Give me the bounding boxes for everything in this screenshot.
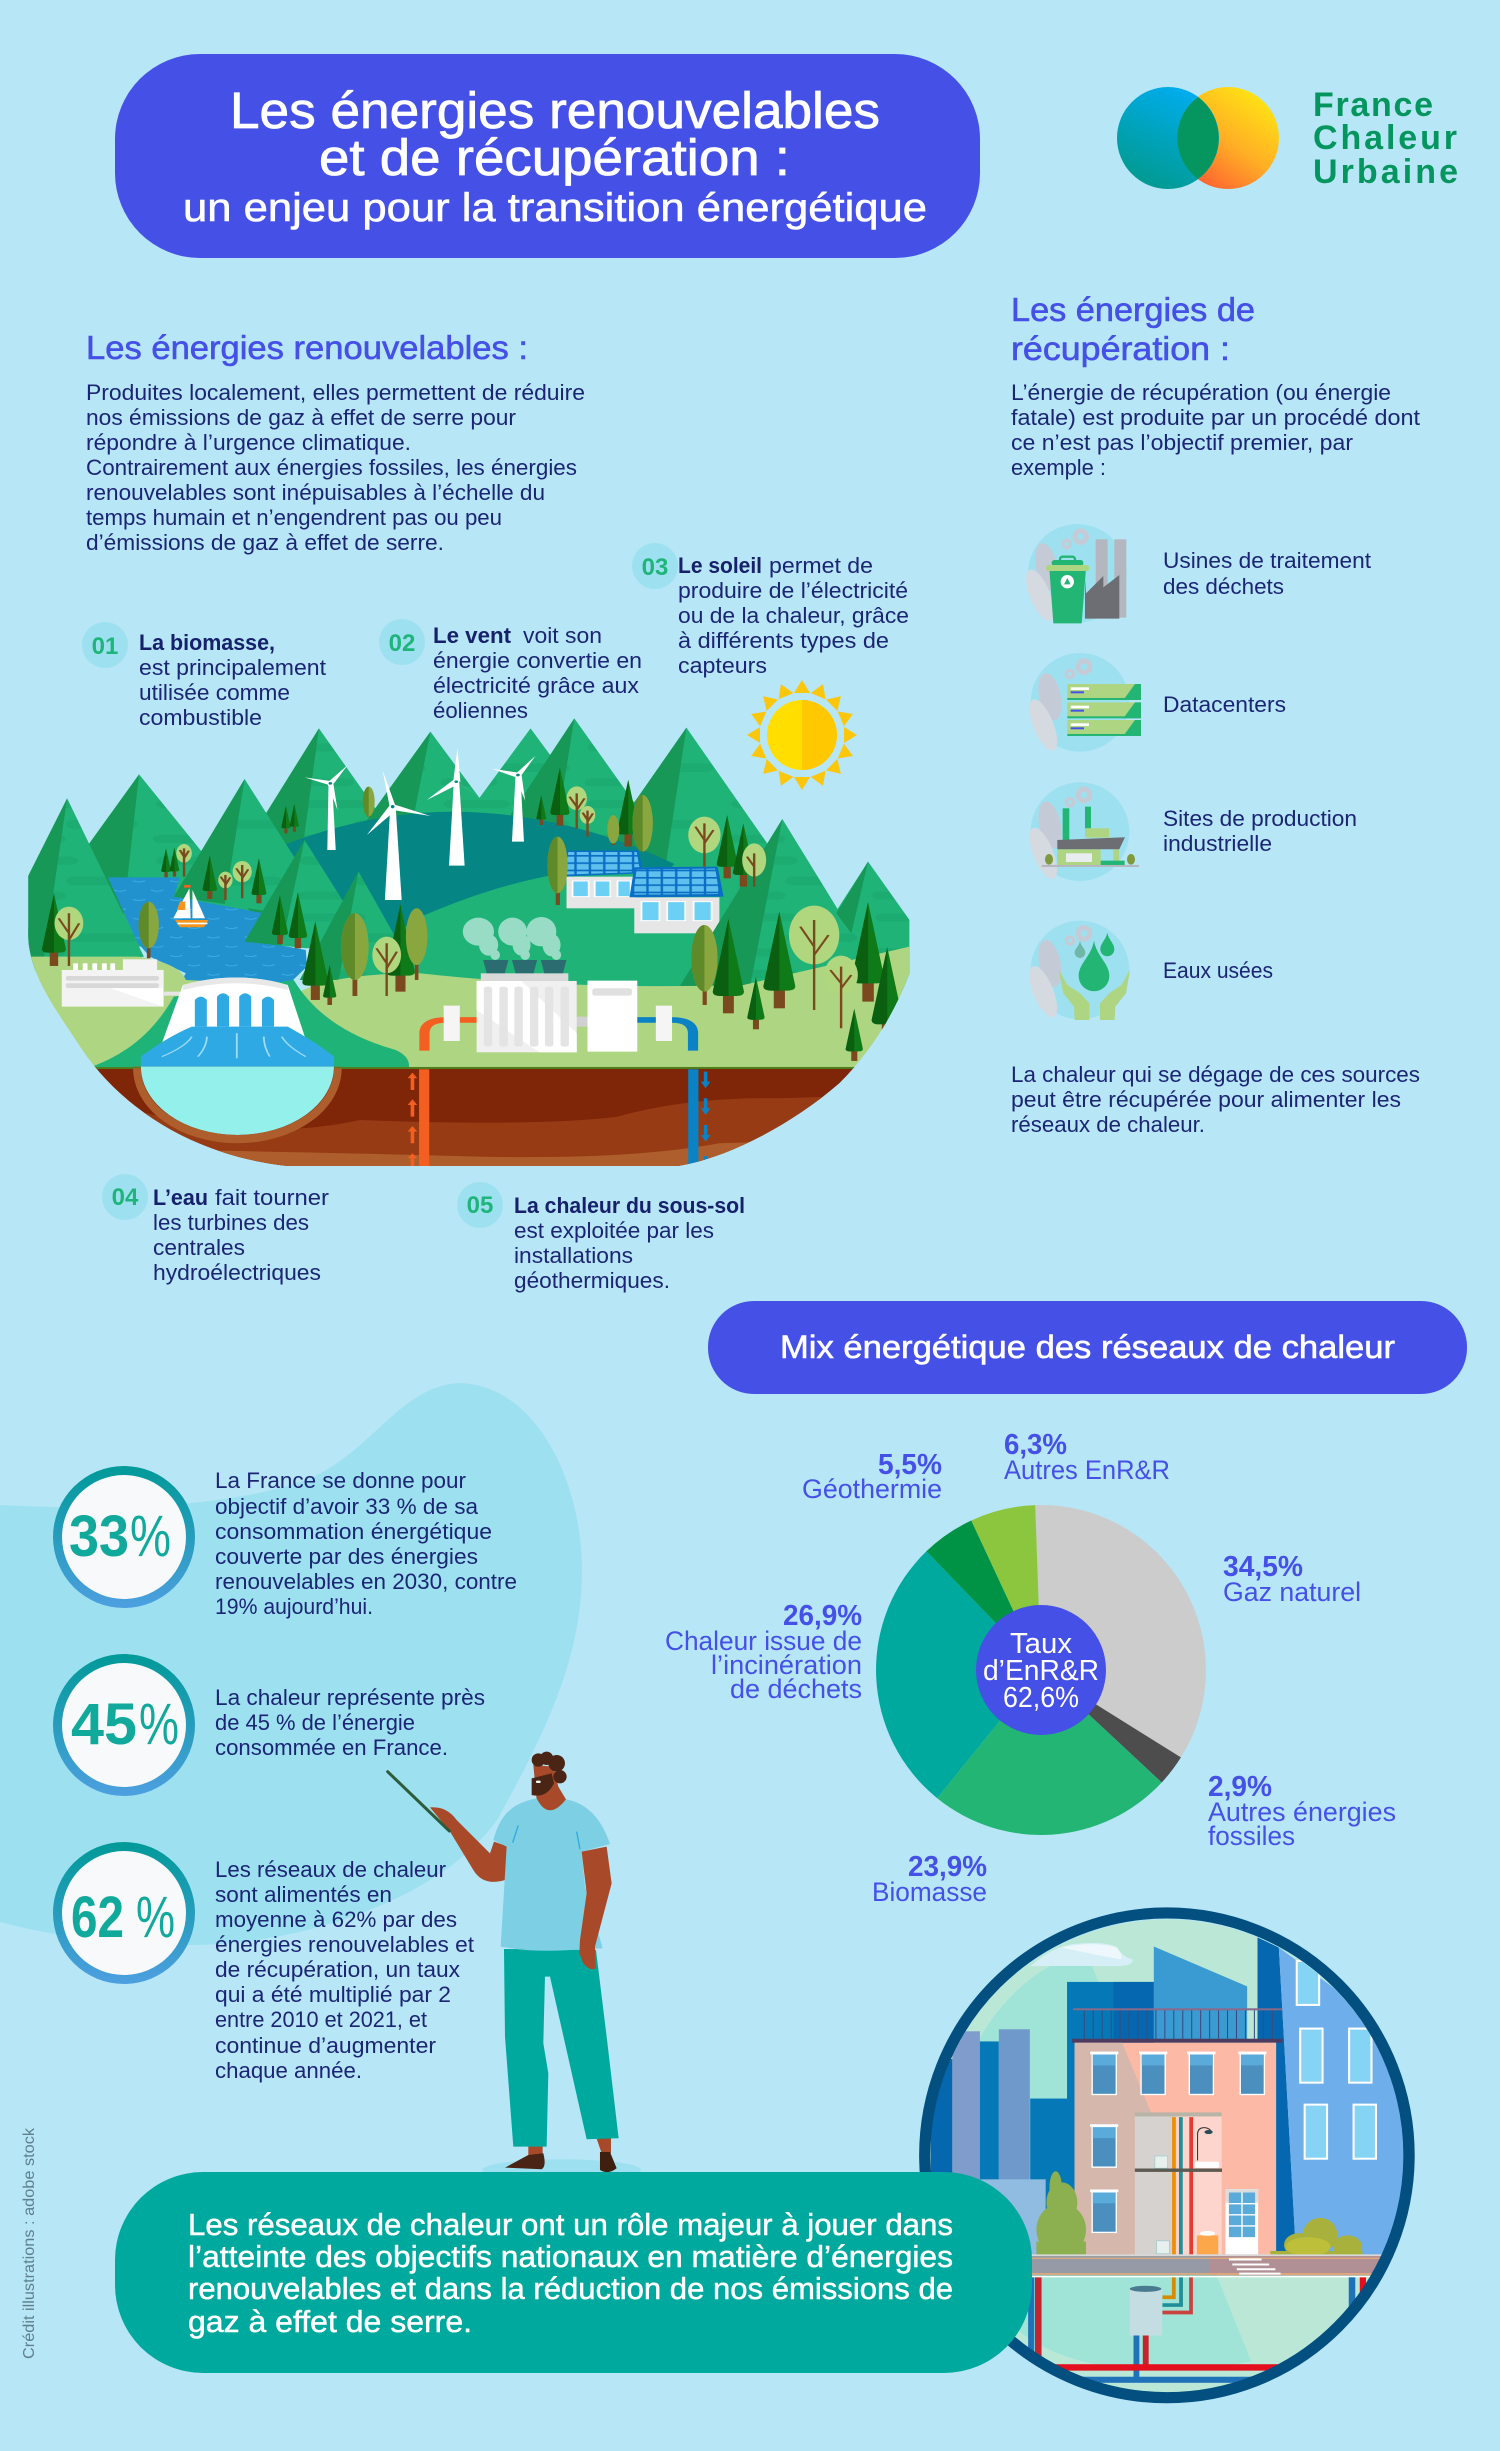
label: autres EnR&R [1004, 1429, 1170, 1485]
title banner: un enjeu pour la transition énergétique [183, 186, 927, 230]
stat 33%: 19% aujourd’hui. [215, 1594, 373, 1619]
stat 62%: Les réseaux de chaleur [215, 1857, 446, 1882]
label: chaleur déchets: de déchets [730, 1674, 862, 1704]
callout 01 biomasse: utilisée comme [139, 680, 290, 705]
stat 33%: % [130, 1504, 171, 1569]
logo France Chaleur Urbaine: Chaleur [1313, 119, 1457, 157]
stat 62% [53, 1842, 474, 2083]
callout 05 sous-sol: La chaleur du sous-sol [514, 1193, 745, 1218]
callout 02 vent [379, 619, 642, 723]
text block: renouvelables intro: d’émissions de gaz à effet de serre. [86, 530, 444, 555]
trees [42, 768, 903, 1061]
reservoir [141, 1067, 334, 1135]
text block: renouvelables intro: nos émissions de gaz à effet de serre pour [86, 405, 516, 430]
boat [173, 885, 209, 927]
banner: mix énergétique [708, 1301, 1467, 1394]
callout 04 eau: centrales [153, 1235, 245, 1260]
callout 02 vent: 02 [389, 630, 415, 657]
callout 03 soleil: Le soleil [678, 553, 762, 578]
conclusion banner [115, 2172, 1032, 2373]
callout 04 eau: fait tourner [215, 1185, 329, 1210]
text block: renouvelables intro: répondre à l’urgence climatique. [86, 430, 411, 455]
callout 02 vent: Le vent [433, 623, 512, 648]
stat 45%: La chaleur représente près [215, 1685, 485, 1710]
logo France Chaleur Urbaine: Urbaine [1313, 153, 1458, 191]
callout 01 biomasse: est principalement [139, 655, 326, 680]
heading: énergies de récupération [1011, 291, 1255, 367]
callout 03 soleil [632, 543, 909, 678]
label: géothermie: 5,5% [878, 1449, 942, 1481]
callout 05 sous-sol: géothermiques. [514, 1268, 670, 1293]
front hill [406, 867, 910, 1014]
label: autres EnR&R: 6,3% [1004, 1429, 1067, 1461]
label: biomasse: Biomasse [872, 1877, 987, 1907]
houses with solar roofs [562, 851, 724, 933]
callout 03 soleil: 03 [642, 554, 668, 581]
callout 03 soleil: produire de l’électricité [678, 578, 908, 603]
underground layers [95, 1066, 854, 1166]
label: sites industriels: industrielle [1163, 831, 1272, 856]
label: chaleur déchets: l’incinération [711, 1650, 862, 1680]
stat 62%: 62 [71, 1885, 124, 1950]
label: gaz naturel [1223, 1551, 1361, 1607]
stat 62%: entre 2010 et 2021, et [215, 2007, 427, 2032]
label: gaz naturel: 34,5% [1223, 1551, 1303, 1583]
logo France Chaleur Urbaine [1117, 86, 1458, 191]
heading: énergies renouvelables: Les énergies renouvelables : [86, 329, 528, 366]
stat 62%: énergies renouvelables et [215, 1932, 474, 1957]
geothermal plant [408, 917, 710, 1168]
left power station [62, 959, 181, 1007]
text block: chaleur récupérée [1011, 1062, 1420, 1137]
stat 62%: % [136, 1885, 175, 1950]
callout 04 eau: L’eau [153, 1185, 208, 1210]
callout 05 sous-sol: installations [514, 1243, 633, 1268]
stat 62%: continue d’augmenter [215, 2033, 436, 2058]
stat 33%: couverte par des énergies [215, 1544, 478, 1569]
stat 62%: sont alimentés en [215, 1882, 392, 1907]
text block: chaleur récupérée: La chaleur qui se dégage de ces sources [1011, 1062, 1420, 1087]
text block: renouvelables intro: temps humain et n’engendrent pas ou peu [86, 505, 502, 530]
label: autres EnR&R: Autres EnR&R [1004, 1455, 1170, 1485]
stat 62%: qui a été multiplié par 2 [215, 1982, 451, 2007]
icon: sun [747, 680, 857, 790]
illustration: paysage énergies renouvelables [0, 718, 959, 1170]
text block: récupération intro [1011, 380, 1420, 480]
green dam hill [87, 980, 409, 1068]
teal hill [286, 812, 674, 934]
hydro dam [133, 978, 342, 1067]
lake and boat [108, 877, 307, 985]
callout 01 biomasse [82, 622, 326, 730]
callout 04 eau: 04 [112, 1184, 139, 1211]
callout 04 eau: les turbines des [153, 1210, 309, 1235]
callout 05 sous-sol: est exploitée par les [514, 1218, 714, 1243]
label: géothermie [802, 1449, 942, 1504]
label: autres fossiles: 2,9% [1208, 1771, 1272, 1803]
text block: renouvelables intro [86, 380, 585, 555]
conclusion banner: gaz à effet de serre. [188, 2304, 472, 2339]
callout 01 biomasse: combustible [139, 705, 262, 730]
logo France Chaleur Urbaine: France [1313, 86, 1433, 124]
icon: eaux usées [1024, 921, 1130, 1021]
stat 62%: moyenne à 62% par des [215, 1907, 457, 1932]
callout 01 biomasse: 01 [92, 633, 118, 660]
stat 33%: objectif d’avoir 33 % de sa [215, 1494, 479, 1519]
text block: chaleur récupérée: peut être récupérée pour alimenter les [1011, 1087, 1401, 1112]
label: eaux usées: Eaux usées [1163, 958, 1273, 983]
text block: renouvelables intro: Produites localement, elles permettent de réduire [86, 380, 585, 405]
title banner: et de récupération : [319, 129, 790, 186]
callout 03 soleil: à différents types de [678, 628, 889, 653]
pie chart: mix énergétique: d’EnR&R [983, 1655, 1099, 1687]
stat 33%: La France se donne pour [215, 1468, 466, 1493]
pie chart: mix énergétique: Taux [1010, 1628, 1072, 1660]
wind turbines [305, 748, 535, 900]
text block: récupération intro: exemple : [1011, 455, 1106, 480]
callout 05 sous-sol: 05 [467, 1192, 493, 1219]
title banner: Les énergies renouvelables [230, 82, 880, 139]
stat 45%: consommée en France. [215, 1735, 448, 1760]
callout 02 vent: énergie convertie en [433, 648, 642, 673]
label: chaleur déchets: 26,9% [783, 1600, 862, 1632]
icon: sites industriels [1024, 782, 1139, 882]
callout 02 vent: électricité grâce aux [433, 673, 639, 698]
callout 01 biomasse: La biomasse, [139, 630, 275, 655]
label: chaleur déchets: Chaleur issue de [665, 1626, 862, 1656]
banner: mix énergétique: Mix énergétique des réseaux de chaleur [780, 1329, 1395, 1365]
text block: récupération intro: ce n’est pas l’objectif premier, par [1011, 430, 1353, 455]
label: chaleur déchets [665, 1600, 862, 1704]
credit: Crédit illustrations : adobe stock [21, 2128, 38, 2359]
callout 04 eau: hydroélectriques [153, 1260, 321, 1285]
back mountains [248, 718, 768, 913]
stat 33%: consommation énergétique [215, 1519, 492, 1544]
label: biomasse: 23,9% [908, 1851, 987, 1883]
label: biomasse [872, 1851, 987, 1907]
conclusion banner: l’atteinte des objectifs nationaux en matière d’énergies [188, 2239, 953, 2274]
stat 45%: de 45 % de l’énergie [215, 1710, 415, 1735]
icon: usine de déchets [1020, 524, 1127, 624]
callout 02 vent: éoliennes [433, 698, 528, 723]
label: usines [1163, 548, 1371, 599]
text block: récupération intro: L’énergie de récupération (ou énergie [1011, 380, 1391, 405]
callout 04 eau [102, 1174, 329, 1285]
label: autres fossiles: Autres énergies [1208, 1797, 1396, 1827]
stat 45% [53, 1654, 485, 1796]
stat 62%: de récupération, un taux [215, 1957, 460, 1982]
person pointing [388, 1752, 641, 2181]
stat 33%: renouvelables en 2030, contre [215, 1569, 517, 1594]
conclusion banner: renouvelables et dans la réduction de nos émissions de [188, 2271, 953, 2306]
label: gaz naturel: Gaz naturel [1223, 1577, 1361, 1607]
text block: renouvelables intro: Contrairement aux énergies fossiles, les énergies [86, 455, 577, 480]
ground [28, 947, 909, 1068]
illustration: quartier et réseau de chaleur [917, 1907, 1420, 2407]
label: géothermie: Géothermie [802, 1474, 942, 1504]
icon: datacenters [1024, 653, 1141, 754]
background blob [0, 1383, 582, 1945]
conclusion banner: Les réseaux de chaleur ont un rôle majeur à jouer dans [188, 2207, 953, 2242]
text block: renouvelables intro: renouvelables sont inépuisables à l’échelle du [86, 480, 545, 505]
heading: énergies de récupération: récupération : [1011, 330, 1230, 367]
heading: énergies de récupération: Les énergies de [1011, 291, 1255, 328]
stat 62%: chaque année. [215, 2058, 362, 2083]
left mountain [28, 774, 250, 947]
callout 02 vent: voit son [523, 623, 602, 648]
callout 03 soleil: permet de [769, 553, 873, 578]
text block: chaleur récupérée: réseaux de chaleur. [1011, 1112, 1205, 1137]
label: datacenters: Datacenters [1163, 692, 1286, 717]
label: usines: des déchets [1163, 574, 1284, 599]
stat 45%: 45 [71, 1692, 137, 1757]
mountains front [0, 779, 959, 990]
stat 33% [53, 1466, 517, 1619]
callout 03 soleil: capteurs [678, 653, 767, 678]
pie chart: mix énergétique: 62,6% [1003, 1682, 1079, 1714]
stat 45%: % [139, 1692, 179, 1757]
label: sites industriels: Sites de production [1163, 806, 1357, 831]
callout 05 sous-sol [457, 1182, 745, 1293]
label: usines: Usines de traitement [1163, 548, 1371, 573]
label: sites industriels [1163, 806, 1357, 856]
pie chart: mix énergétique [876, 1505, 1206, 1835]
text block: récupération intro: fatale) est produite par un procédé dont [1011, 405, 1420, 430]
stat 33%: 33 [69, 1504, 129, 1569]
label: autres fossiles [1208, 1771, 1396, 1851]
title banner [115, 54, 980, 258]
label: autres fossiles: fossiles [1208, 1821, 1295, 1851]
callout 03 soleil: ou de la chaleur, grâce [678, 603, 909, 628]
